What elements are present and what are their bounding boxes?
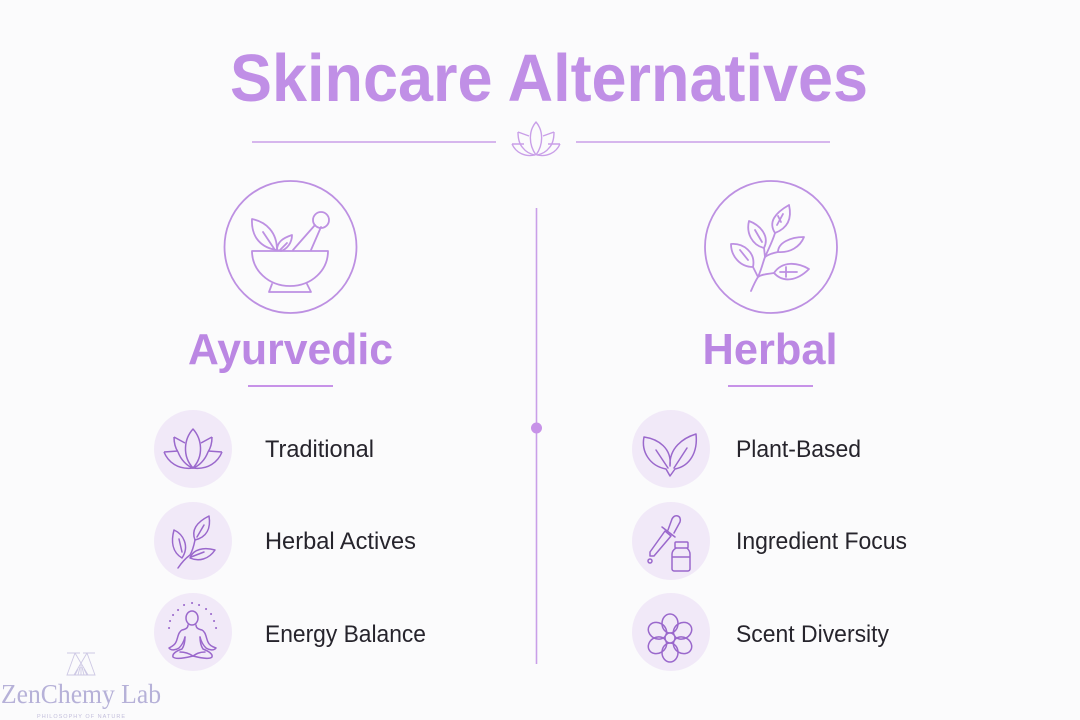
title: Skincare Alternatives: [230, 41, 868, 116]
item: Energy Balance: [154, 593, 426, 671]
title divider with lotus: [252, 122, 830, 156]
item: Scent Diversity: [632, 593, 889, 671]
item: Herbal Actives: [154, 502, 416, 580]
panel: Ayurvedic list: [154, 410, 426, 671]
item: Plant-Based: Plant-Based: [736, 436, 861, 463]
heading underline: Herbal: [728, 385, 813, 387]
item: Traditional: [154, 410, 374, 488]
center vertical divider: [531, 208, 542, 664]
heading underline: Ayurvedic: [248, 385, 333, 387]
item: Scent Diversity: Scent Diversity: [736, 621, 889, 648]
item: Herbal Actives: Herbal Actives: [265, 528, 416, 555]
watermark logo: ZenChemy Lab: [1, 679, 161, 709]
heading: Ayurvedic: Ayurvedic: [188, 325, 393, 374]
watermark logo: PHILOSOPHY OF NATURE: [37, 714, 125, 720]
item: Plant-Based: [632, 410, 861, 488]
item: Energy Balance: Energy Balance: [265, 621, 426, 648]
icon: mortar and pestle: [224, 181, 356, 313]
watermark logo: [1, 653, 161, 720]
icon: herbal branch: [705, 181, 837, 313]
heading: Herbal: Herbal: [702, 325, 838, 374]
item: Ingredient Focus: [632, 502, 907, 580]
item: Ingredient Focus: Ingredient Focus: [736, 528, 907, 555]
item: Traditional: Traditional: [265, 436, 374, 463]
icon: logo triangles: [67, 653, 95, 675]
panel: Herbal list: [632, 410, 907, 671]
